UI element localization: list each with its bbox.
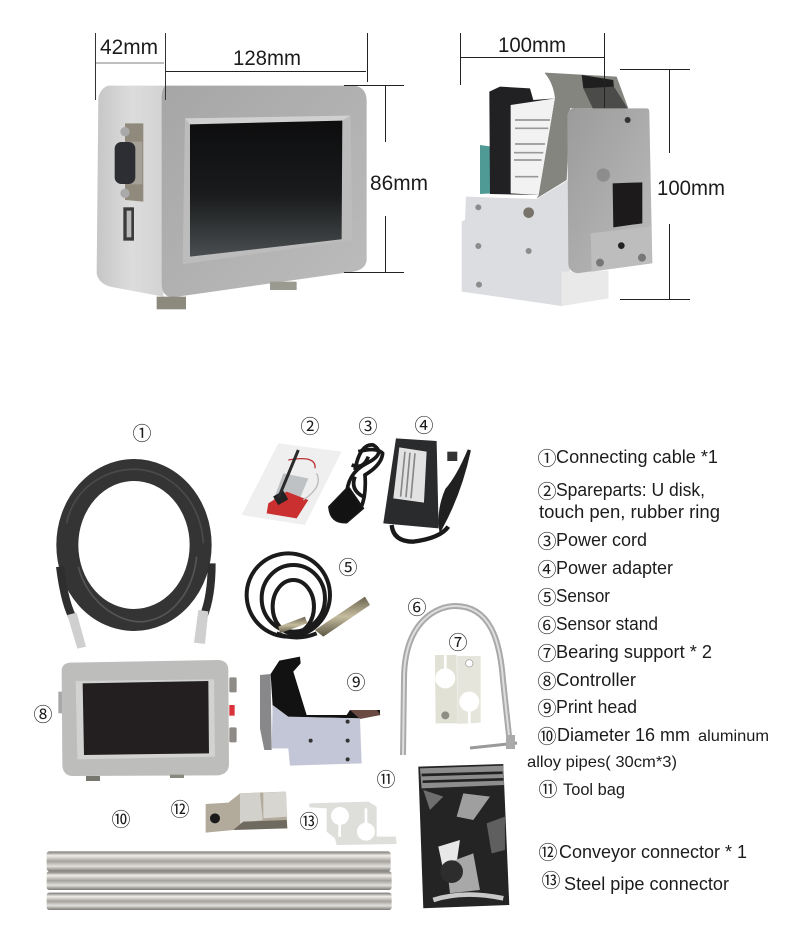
callout numbers on photos: ⑪ [376, 769, 396, 791]
item 10: Diameter 16 mm [557, 725, 690, 745]
callout numbers on photos [33, 415, 468, 833]
86mm dimension: 86mm [370, 172, 428, 195]
item 2: ② [537, 481, 557, 503]
photo: controller with dimensions [96, 33, 428, 309]
callout numbers on photos: ⑥ [407, 597, 427, 619]
width dimension [460, 33, 605, 108]
item 3: ③ [537, 531, 557, 553]
item 10: aluminum [698, 728, 769, 745]
height dimension [620, 69, 725, 300]
128mm dimension: 128mm [233, 47, 301, 70]
item 11: ⑪ [538, 779, 558, 801]
callout numbers on photos: ⑨ [346, 672, 366, 694]
item 8: ⑧ [537, 671, 557, 693]
item 12: Conveyor connector * 1 [559, 842, 747, 862]
item 10 [527, 725, 769, 771]
item 6: Sensor stand [556, 614, 658, 634]
item 5: Sensor [556, 586, 610, 606]
icon: power cord [329, 445, 383, 523]
42mm dimension [96, 33, 166, 100]
item 8: Controller [556, 670, 636, 690]
callout numbers on photos: ⑩ [111, 809, 131, 831]
item 13: ⑬ [541, 870, 561, 892]
item 11: Tool bag [563, 781, 625, 799]
item 10: ⑩ [537, 726, 557, 748]
icon: tool bag [418, 764, 509, 908]
128mm dimension [166, 33, 368, 82]
callout numbers on photos: ③ [358, 416, 378, 438]
icon: power adapter [383, 438, 469, 542]
icon: aluminum pipes [47, 851, 392, 910]
icon: print head assembly [462, 73, 652, 306]
width dimension: 100mm [498, 34, 566, 57]
photo: print head with dimensions [460, 33, 725, 306]
callout numbers on photos: ⑦ [448, 632, 468, 654]
item 10: alloy pipes( 30cm*3) [527, 754, 677, 771]
42mm dimension: 42mm [100, 36, 158, 59]
callout numbers on photos: ② [300, 416, 320, 438]
callout numbers on photos: ⑧ [33, 704, 53, 726]
icon: steel pipe connector [309, 802, 397, 845]
icon: connecting cable [60, 469, 212, 649]
callout numbers on photos: ⑫ [170, 799, 190, 821]
item 6: ⑥ [537, 615, 557, 637]
callout numbers on photos: ④ [414, 415, 434, 437]
item 7: ⑦ [537, 643, 557, 665]
callout numbers on photos: ① [132, 423, 152, 445]
icon: print head [260, 657, 381, 766]
callout numbers on photos: ⑬ [299, 811, 319, 833]
item 8 [537, 670, 636, 693]
item 12: ⑫ [538, 842, 558, 864]
icon: spare parts bag [242, 443, 342, 525]
item 9: Print head [556, 697, 637, 717]
86mm dimension [344, 85, 428, 272]
icon: sensor [247, 553, 370, 637]
icon: controller front view [58, 660, 237, 781]
item 13: Steel pipe connector [564, 874, 729, 894]
icon: conveyor connector [206, 792, 287, 833]
item 9: ⑨ [537, 698, 557, 720]
height dimension: 100mm [657, 177, 725, 200]
icon: bearing support [435, 655, 481, 724]
item 2: touch pen, rubber ring [539, 502, 720, 522]
icon: sensor stand [403, 606, 517, 755]
callout numbers on photos: ⑤ [338, 557, 358, 579]
item 1: ① [537, 448, 557, 470]
item 1: Connecting cable *1 [556, 447, 718, 467]
item 4: ④ [537, 559, 557, 581]
item 7: Bearing support * 2 [556, 642, 712, 662]
icon: controller body [97, 86, 367, 309]
item 11 [538, 779, 625, 801]
parts list [527, 447, 769, 894]
item 2: Spareparts: U disk, [556, 480, 705, 500]
item 4: Power adapter [556, 558, 673, 578]
item 5: ⑤ [537, 587, 557, 609]
item 5 [537, 586, 610, 609]
item 3: Power cord [556, 530, 647, 550]
item 2 [537, 480, 720, 522]
